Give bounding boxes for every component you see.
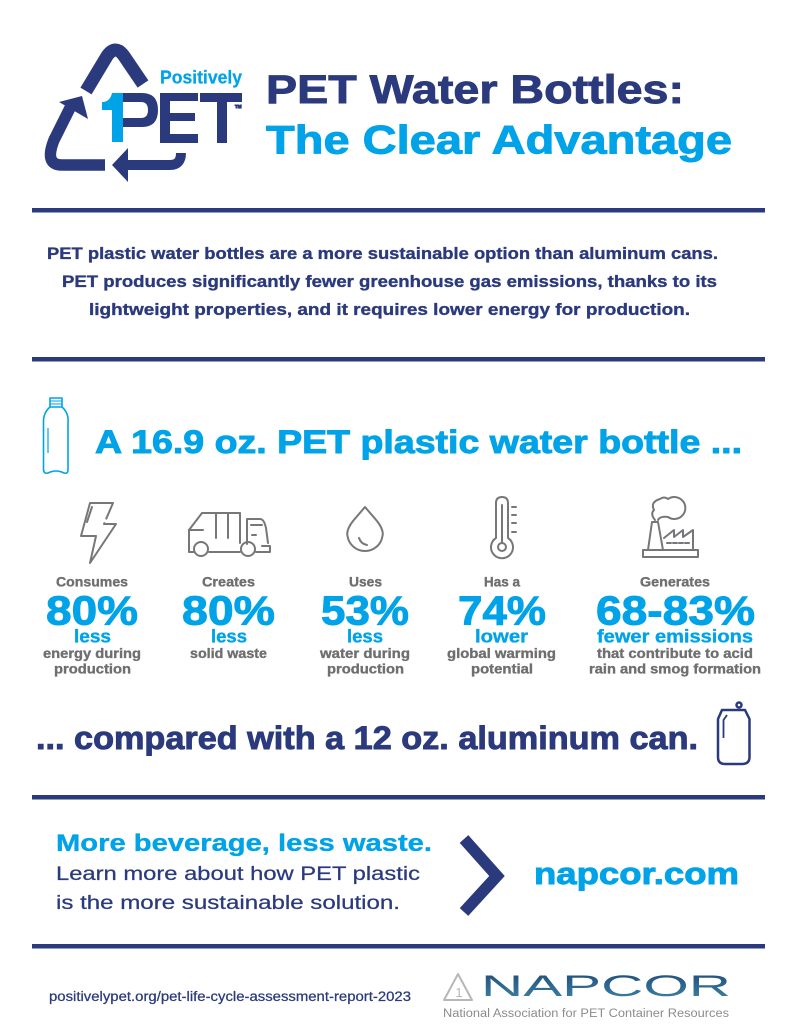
icon: aluminum can	[718, 702, 750, 764]
icon: factory	[643, 497, 698, 557]
stat: emissions: fewer emissions	[597, 626, 753, 646]
icon: lightning bolt	[81, 503, 116, 563]
stat: global warming: global warming	[447, 646, 556, 661]
stat: energy: less	[74, 626, 111, 646]
stat: emissions: 68-83%	[596, 588, 755, 634]
stat: water	[319, 574, 410, 676]
icon: thermometer	[491, 497, 516, 558]
stat: emissions: that contribute to acid	[597, 646, 753, 661]
logo: NAPCOR	[443, 970, 731, 1020]
call to action text: is the more sustainable solution.	[56, 892, 400, 914]
stat: water: 53%	[321, 588, 409, 634]
footer url: positivelypet.org/pet-life-cycle-assessment-report-2023	[49, 989, 411, 1004]
intro text: PET plastic water bottles are a more sustainable option than aluminum cans.	[47, 245, 718, 263]
link: napcor.com: napcor.com	[534, 856, 739, 891]
stat: water: production	[327, 662, 404, 676]
stat: energy: energy during	[43, 646, 141, 661]
stat: water: Uses	[349, 574, 382, 590]
stat: solid waste: Creates	[202, 574, 255, 590]
stat: global warming: potential	[471, 662, 533, 676]
1 numeral	[102, 93, 123, 142]
stat: energy: 80%	[46, 588, 138, 634]
title	[266, 68, 732, 162]
intro text: PET produces significantly fewer greenhouse gas emissions, thanks to its	[62, 273, 717, 291]
arrow: chevron	[464, 839, 497, 912]
stat: solid waste: solid waste	[190, 646, 268, 661]
title: The Clear Advantage	[266, 118, 732, 162]
triangle mark	[444, 974, 472, 1000]
call to action text: Learn more about how PET plastic	[56, 863, 420, 885]
stat: global warming: lower	[475, 626, 528, 646]
tagline: National Association for PET Container Resources	[443, 1008, 729, 1020]
intro text	[47, 245, 718, 319]
stat: global warming	[447, 574, 556, 676]
stat: solid waste: less	[211, 626, 247, 646]
Positively wordmark: Positively	[160, 68, 242, 88]
icon: garbage truck	[189, 513, 270, 556]
stat: emissions	[589, 574, 761, 676]
stat: solid waste: 80%	[182, 588, 275, 634]
stat: emissions: rain and smog formation	[589, 662, 761, 676]
trademark: TM	[235, 104, 242, 109]
title: PET Water Bottles:	[266, 68, 684, 112]
logo: NAPCOR: 1	[455, 985, 463, 1000]
recycling arrows	[50, 50, 181, 165]
stat: global warming: Has a	[484, 574, 520, 590]
call to action text	[56, 830, 432, 914]
heading: bottle: A 16.9 oz. PET plastic water bottle ...	[95, 424, 742, 460]
PET letters	[123, 93, 242, 143]
stat: water: less	[347, 626, 383, 646]
stat: energy	[43, 574, 141, 676]
stat: energy: production	[54, 662, 131, 676]
stat: emissions: Generates	[640, 574, 710, 590]
stat: solid waste	[182, 574, 275, 661]
stat: global warming: 74%	[458, 588, 546, 634]
intro text: lightweight properties, and it requires lower energy for production.	[89, 301, 690, 319]
wordmark: NAPCOR	[481, 970, 731, 1003]
heading: can comparison: ... compared with a 12 oz. aluminum can.	[36, 720, 698, 756]
icon: water bottle	[43, 398, 68, 473]
stat: energy: Consumes	[56, 574, 128, 590]
logo: Positively PET	[50, 50, 242, 182]
icon: water drop	[347, 507, 383, 551]
stat: water: water during	[319, 646, 410, 661]
call to action text: More beverage, less waste.	[56, 830, 432, 857]
